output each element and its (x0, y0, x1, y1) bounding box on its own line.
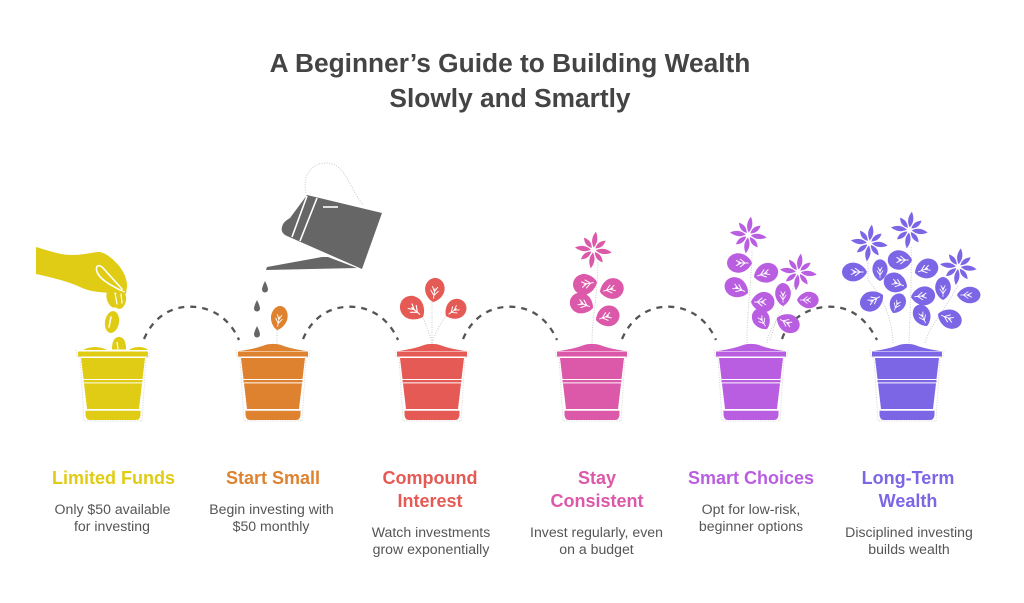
step text: compound interest: grow exponentially (373, 541, 490, 557)
pot: compound interest (395, 344, 469, 421)
icon: hand dropping coins (36, 247, 148, 350)
step text: limited funds: Only $50 available (55, 501, 171, 517)
step text: smart choices: Opt for low-risk, (702, 501, 800, 517)
step text: stay consistent (530, 468, 663, 557)
pot: start small (236, 344, 310, 421)
arrow: dashed arc from stay consistent to smart choices (622, 307, 716, 340)
title: Slowly and Smartly (389, 83, 631, 113)
step text: compound interest: Compound (383, 468, 477, 488)
arrow: dashed arc from start small to compound interest (303, 307, 398, 340)
title: A Beginner’s Guide to Building Wealth (270, 48, 750, 78)
step text: limited funds (52, 468, 175, 534)
title (270, 48, 750, 113)
step text: long-term wealth: Wealth (879, 491, 937, 511)
step text: stay consistent: Invest regularly, even (530, 524, 663, 540)
step text: stay consistent: Stay (578, 468, 616, 488)
step text: compound interest: Interest (397, 491, 463, 511)
step text: limited funds: Limited Funds (52, 468, 175, 488)
step text: smart choices (688, 468, 814, 534)
plant: two flowers (721, 216, 819, 343)
step text: long-term wealth (845, 468, 973, 557)
step text: long-term wealth: Disciplined investing (845, 524, 973, 540)
icon: watering can (254, 163, 382, 338)
step text: start small: Start Small (226, 468, 320, 488)
arrow: dashed arc from limited funds to start small (144, 307, 239, 340)
step text: long-term wealth: Long-Term (862, 468, 954, 488)
plant: three flowers (842, 211, 980, 343)
step text: stay consistent: on a budget (559, 541, 634, 557)
step text: smart choices: Smart Choices (688, 468, 814, 488)
step text: compound interest: Watch investments (372, 524, 490, 540)
pot: limited funds (76, 350, 150, 421)
pot: stay consistent (555, 344, 629, 421)
step text: long-term wealth: builds wealth (868, 541, 950, 557)
step text: start small: $50 monthly (233, 518, 310, 534)
step text: limited funds: for investing (74, 518, 150, 534)
plant: three leaves (395, 277, 470, 343)
step text: start small: Begin investing with (209, 501, 334, 517)
pot: long-term wealth (870, 344, 944, 421)
pot: smart choices (714, 344, 788, 421)
step text: compound interest (372, 468, 490, 557)
step text: start small (209, 468, 334, 534)
plant: sprout (269, 305, 289, 344)
arrow: dashed arc from smart choices to long-term wealth (782, 307, 877, 340)
plant: single flower (567, 231, 626, 343)
step text: stay consistent: Consistent (550, 491, 644, 511)
step text: smart choices: beginner options (699, 518, 803, 534)
arrow: dashed arc from compound interest to stay consistent (463, 307, 557, 340)
